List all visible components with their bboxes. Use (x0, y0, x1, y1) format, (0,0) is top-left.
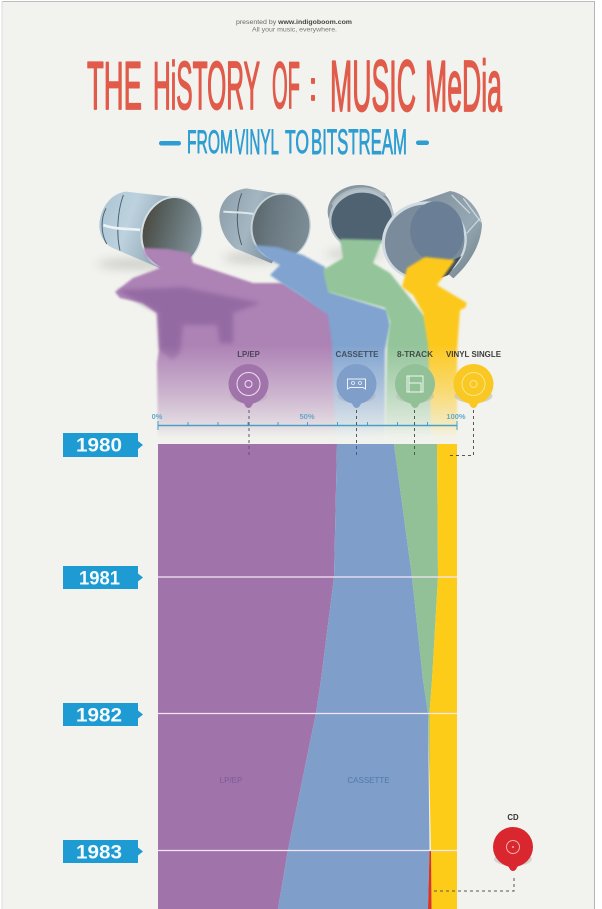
presenter credit: presented by www.indigoboom.com (236, 19, 352, 26)
spill: purple shadow patches (117, 287, 260, 360)
area: cassette (278, 444, 430, 909)
marker: LP/EP: LP/EP (237, 350, 260, 359)
year tag: 1981 (63, 566, 143, 590)
can: green (325, 185, 398, 254)
year tag: 1982 (63, 703, 143, 726)
year tag: 1981: 1981 (79, 568, 120, 590)
subtitle: FROM (187, 124, 233, 160)
marker: 8-track: 8-TRACK (397, 350, 433, 359)
marker: LP/EP (228, 350, 268, 456)
year tag: 1983: 1983 (76, 842, 122, 864)
subtitle: BITSTREAM (311, 123, 407, 162)
subtitle (159, 123, 429, 162)
area: 8-track (394, 444, 438, 780)
can shadows (97, 250, 385, 269)
spill: purple (115, 248, 338, 444)
percentage axis (152, 412, 466, 430)
marker: cassette (336, 350, 378, 456)
spill fade (100, 345, 480, 444)
title (87, 47, 502, 127)
percentage axis: 0% (152, 412, 163, 421)
title: THE (87, 48, 142, 124)
area: CD (428, 850, 432, 909)
area: vinyl single (428, 444, 457, 909)
marker: vinyl single (446, 350, 501, 456)
area: LP/EP (158, 444, 337, 909)
marker: vinyl single: VINYL SINGLE (446, 350, 501, 359)
year tag: 1983 (63, 840, 143, 864)
label: LP/EP: LP/EP (220, 776, 242, 785)
year tag: 1982: 1982 (76, 706, 122, 726)
subtitle: TO (285, 124, 309, 160)
spill: yellow (402, 257, 467, 444)
year lines (158, 577, 458, 850)
can: purple (99, 189, 211, 276)
marker: CD (433, 813, 533, 891)
marker: cassette: CASSETTE (336, 350, 378, 359)
percentage axis: 50% (299, 412, 315, 421)
year tag: 1980 (63, 433, 143, 457)
can: blue (219, 188, 316, 265)
title: MUSIC (330, 47, 416, 127)
year tag: 1980: 1980 (76, 436, 122, 456)
presenter credit (236, 19, 352, 34)
presenter credit: All your music, everywhere. (252, 26, 337, 34)
title: OF (272, 48, 300, 122)
can: yellow (373, 191, 482, 290)
percentage axis: 100% (446, 412, 466, 421)
marker: CD: CD (507, 813, 519, 822)
paint cans and spill (97, 185, 482, 444)
spill: blue (253, 245, 390, 444)
stacked area chart (158, 444, 458, 909)
subtitle: VINYL (235, 123, 279, 162)
title: : (309, 65, 317, 109)
marker: 8-track (395, 350, 435, 456)
title: HiSTORY (153, 48, 260, 124)
label: cassette: CASSETTE (347, 776, 390, 785)
spill: green (323, 239, 432, 444)
